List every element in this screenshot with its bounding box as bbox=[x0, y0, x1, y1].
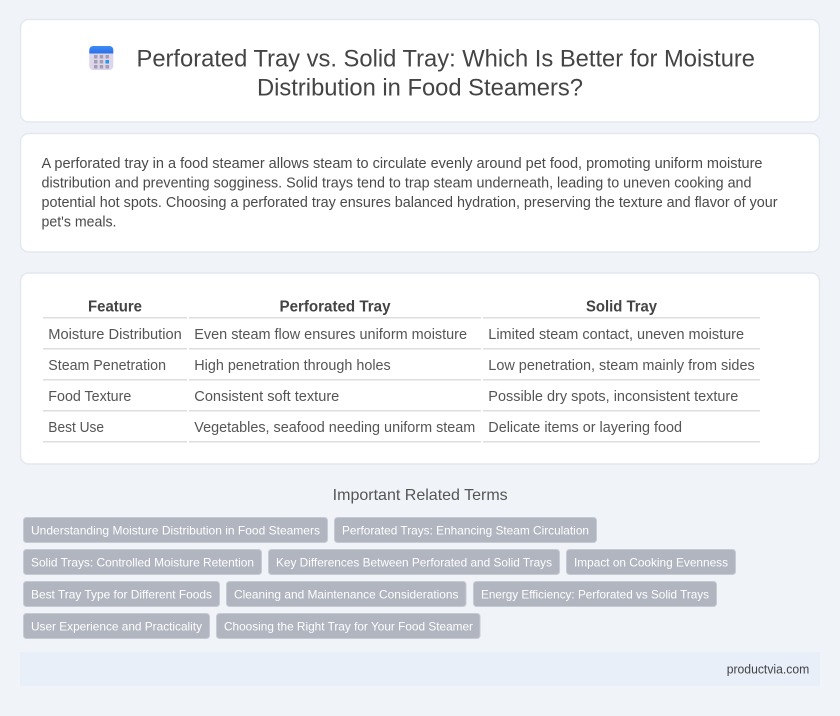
table row: food texture bbox=[48, 389, 738, 405]
title: Distribution in Food Steamers? bbox=[257, 74, 583, 102]
icon: calendar grid bbox=[89, 46, 113, 70]
table row: moisture distribution: Moisture Distribution bbox=[48, 327, 182, 343]
panel: comparison table bbox=[20, 273, 820, 464]
footer bbox=[20, 652, 820, 686]
text block: summary: distribution and preventing sogginess. Solid trays tend to trap steam underneath, leading to uneven cooking and bbox=[42, 176, 752, 192]
related term tags: User Experience and Practicality bbox=[31, 619, 202, 633]
text block: summary: A perforated tray in a food steamer allows steam to circulate evenly around pet food, promoting uniform moisture bbox=[42, 156, 762, 172]
related term tags: Energy Efficiency: Perforated vs Solid Trays bbox=[481, 587, 709, 601]
table row: food texture: Food Texture bbox=[48, 389, 131, 405]
table row: best use: Best Use bbox=[48, 420, 104, 436]
related term tags: Cleaning and Maintenance Considerations bbox=[234, 587, 458, 601]
table row: best use bbox=[48, 420, 682, 436]
table row: food texture: Consistent soft texture bbox=[194, 389, 339, 405]
related term tags: Perforated Trays: Enhancing Steam Circulation bbox=[342, 523, 589, 537]
related term tags: Best Tray Type for Different Foods bbox=[31, 587, 212, 601]
table row: best use: Delicate items or layering food bbox=[488, 420, 682, 436]
related term tags bbox=[24, 518, 736, 638]
table header: Perforated Tray bbox=[280, 298, 391, 316]
panel: summary paragraph bbox=[20, 134, 820, 252]
table row: steam penetration: Low penetration, steam mainly from sides bbox=[488, 358, 755, 374]
table row: steam penetration bbox=[48, 358, 755, 374]
related term tags: Understanding Moisture Distribution in Food Steamers bbox=[31, 523, 320, 537]
table row: moisture distribution: Limited steam contact, uneven moisture bbox=[488, 327, 744, 343]
table row: steam penetration: High penetration through holes bbox=[194, 358, 391, 374]
table header bbox=[88, 298, 657, 316]
table row: moisture distribution bbox=[48, 327, 744, 343]
related term tags: Impact on Cooking Evenness bbox=[574, 555, 728, 569]
footer source text: productvia.com bbox=[727, 661, 809, 676]
title: Perforated Tray vs. Solid Tray: Which Is Better for Moisture bbox=[136, 46, 755, 72]
table row: food texture: Possible dry spots, inconsistent texture bbox=[488, 389, 738, 405]
related term tags: Solid Trays: Controlled Moisture Retention bbox=[31, 555, 254, 569]
related term tags: Key Differences Between Perforated and Solid Trays bbox=[276, 555, 552, 569]
table row: moisture distribution: Even steam flow ensures uniform moisture bbox=[194, 327, 467, 343]
heading: important related terms: Important Related Terms bbox=[333, 487, 508, 504]
text block: summary: potential hot spots. Choosing a perforated tray ensures balanced hydration, preserving the texture and flavor of your bbox=[42, 195, 778, 211]
related term tags: Choosing the Right Tray for Your Food Steamer bbox=[224, 619, 473, 633]
table row: steam penetration: Steam Penetration bbox=[48, 358, 166, 374]
table header: Feature bbox=[88, 298, 142, 316]
table row: best use: Vegetables, seafood needing uniform steam bbox=[194, 420, 475, 436]
table header: Solid Tray bbox=[586, 298, 657, 316]
text block: summary: pet's meals. bbox=[42, 214, 116, 230]
panel: header bbox=[20, 20, 820, 122]
